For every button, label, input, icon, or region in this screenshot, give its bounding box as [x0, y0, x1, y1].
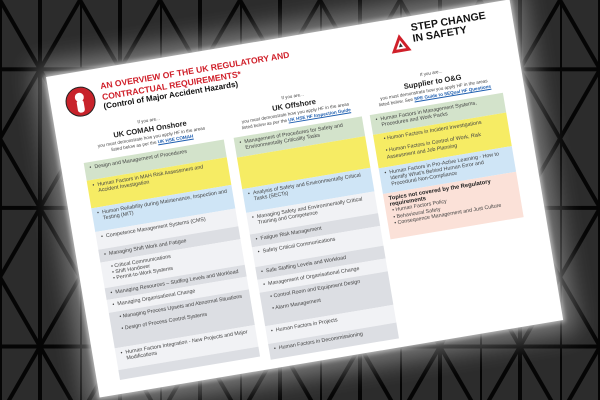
- header: UK COMAH Onshore: you must demonstrate how you apply HF in the areas: [97, 125, 205, 148]
- panel: UK Offshore topics: Management of Organisational Change: [268, 266, 360, 287]
- panel: UK COMAH Onshore topics: Human Factors Integration - New Projects and Major Modifications: [125, 329, 248, 362]
- icon: red circle logo: [63, 84, 98, 119]
- panel: UK COMAH Onshore topics: Managing Organisational Change: [117, 288, 196, 307]
- panel: Supplier to O&G topics: • Human Factors in Control of Work, Risk Assessment and Job Planning: [385, 132, 482, 160]
- panel: UK Offshore topics: • Alarm Management: [272, 298, 322, 312]
- header: UK Offshore: UK Offshore: [271, 97, 317, 113]
- title: CONTRACTUAL REQUIREMENTS*: [101, 68, 242, 101]
- panel: Supplier to O&G topics: [370, 92, 524, 240]
- panel: UK COMAH Onshore topics: Managing Resources – Staffing Levels and Workload: [115, 269, 239, 295]
- header: UK COMAH Onshore: If you are...: [137, 116, 160, 124]
- header: Supplier to O&G: Supplier to O&G: [403, 73, 462, 91]
- panel: UK Offshore topics: Human Factors in Decommissioning: [278, 331, 363, 351]
- panel: UK Offshore topics: Analysis of Safety and Environmentally Critical Tasks (SECTs): [253, 172, 361, 202]
- header: UK Offshore: If you are...: [281, 92, 304, 100]
- panel: UK COMAH Onshore topics: • Permit-to-Work Systems: [113, 266, 174, 282]
- header: Supplier to O&G: [378, 69, 492, 107]
- panel: UK COMAH Onshore topics: • Managing Process Upsets and Abnormal Situations: [119, 294, 242, 320]
- panel: UK Offshore topics: • Control Room and Equipment Design: [270, 279, 361, 300]
- panel: UK COMAH Onshore topics: Human Reliability during Maintenance, Inspection and Testing (MIT): [102, 189, 228, 222]
- panel: UK Offshore topics: Safety Critical Communications: [262, 237, 336, 255]
- panel: UK COMAH Onshore topics: [84, 140, 260, 380]
- header: Supplier to O&G: listed below. See SPE Guide to SEQual HF Questions: [378, 83, 491, 107]
- panel: UK Offshore topics: Managing Safety and Environmentally Critical Training and Competence: [257, 196, 363, 226]
- panel: UK Offshore topics: [234, 116, 399, 360]
- title: (Control of Major Accident Hazards): [103, 79, 239, 111]
- header: Supplier to O&G: If you are...: [420, 69, 443, 77]
- panel: UK Offshore topics: Fatigue Risk Management: [260, 226, 322, 242]
- header: UK Offshore: [241, 92, 352, 130]
- header: UK Offshore: you must demonstrate how you apply HF in the areas: [241, 101, 349, 124]
- panel: UK Offshore topics: Safe Staffing Levels and Workload: [266, 255, 347, 274]
- panel: Supplier to O&G topics: Human Factors in Pro-Active Learning - How to Identify What's Behind Human Error and Procedural Non-Compliance: [389, 151, 499, 188]
- logo: Step Change in Safety: IN SAFETY: [412, 23, 468, 44]
- panel: UK COMAH Onshore topics: • Critical Communications: [111, 254, 171, 270]
- callout: topics not covered: Topics not covered by the Regulatory requirements: [388, 179, 491, 208]
- header: UK COMAH Onshore: [97, 116, 205, 152]
- header: UK COMAH Onshore: UK COMAH Onshore: [113, 118, 187, 140]
- panel: UK COMAH Onshore topics: Human Factors in MAH Risk Assessment and Accident Investigation: [97, 164, 204, 194]
- logo: Step Change in Safety: [392, 10, 487, 54]
- panel: UK COMAH Onshore topics: • Design of Process Control Systems: [121, 312, 208, 332]
- panel: UK COMAH Onshore topics: Competence Management Systems (CMS): [106, 217, 206, 239]
- panel: UK COMAH Onshore topics: Managing Shift Work and Fatigue: [109, 238, 187, 257]
- header: Supplier to O&G: you must demonstrate how you apply HF in the areas: [380, 78, 488, 101]
- callout: topics not covered: • Behavioural Safety: [393, 206, 441, 220]
- panel: UK Offshore topics: Management of Procedures for Safety and Environmentally Criticality Tasks: [244, 123, 343, 151]
- panel: Supplier to O&G topics: Human Factors in Management Systems, Procedures and Work Packs: [380, 100, 477, 128]
- panel: UK COMAH Onshore topics: • Shift Handover: [112, 264, 151, 276]
- callout: topics not covered: • Consequence Management and Just Culture: [394, 202, 502, 226]
- logo: Step Change in Safety: STEP CHANGE: [410, 10, 487, 34]
- title: AN OVERVIEW OF THE UK REGULATORY AND: [99, 50, 290, 91]
- header: UK Offshore: listed below as per the UK HSE HF Inspection Guide: [241, 107, 351, 130]
- panel: UK Offshore topics: Human Factors in Projects: [276, 317, 338, 333]
- panel: Supplier to O&G topics: • Human Factors in Incident Investigations: [383, 120, 482, 142]
- title: [99, 50, 290, 111]
- callout: topics not covered: [383, 172, 524, 239]
- header: UK COMAH Onshore: listed below as per the UK HSE COMAH: [111, 133, 194, 152]
- callout: topics not covered: • Human Factors Policy: [392, 199, 447, 214]
- panel: UK COMAH Onshore topics: Design and Management of Procedures: [94, 149, 187, 170]
